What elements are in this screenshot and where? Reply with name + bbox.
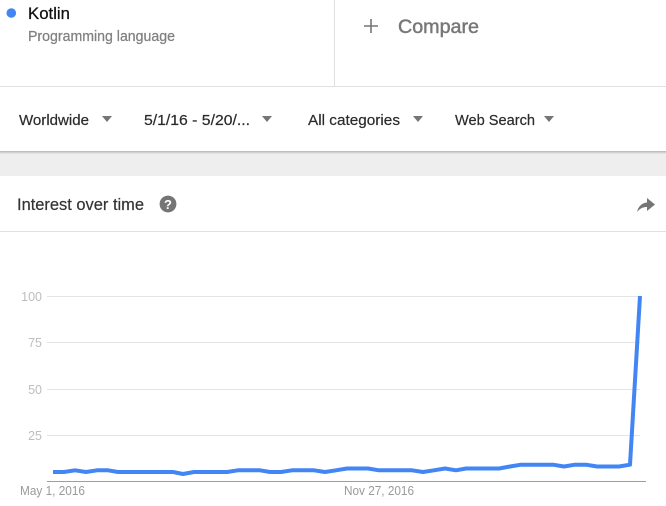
chart gridlines [47,296,640,436]
filter: Worldwide: Worldwide [19,112,89,129]
grey separator band [0,151,666,176]
data line: Kotlin [53,296,640,474]
panel: interest over time header [0,176,666,232]
y axis labels: 25 [28,429,42,443]
x axis labels: May 1, 2016 [20,484,85,498]
y axis labels [21,290,42,443]
line chart: interest over time [20,290,646,498]
x axis labels: Nov 27, 2016 [344,484,414,498]
filter: Web Search: Web Search [455,112,535,129]
panel: filter bar [0,87,666,152]
icon: help [160,196,176,212]
term name: Kotlin: Kotlin [28,5,70,23]
y axis labels: 75 [28,336,42,350]
compare label: Compare [398,16,479,38]
filter: All categories: All categories [308,112,400,129]
icon: plus [364,19,378,33]
icon: Kotlin blue series dot [6,8,16,18]
panel: search term header [0,0,666,87]
x axis labels [20,484,414,498]
icon: share arrow [637,198,655,212]
filter: date range: 5/1/16 - 5/20/... [144,112,250,129]
icon: help: ? [164,197,172,212]
heading: Interest over time: Interest over time [17,196,144,214]
x axis line [47,481,646,482]
y axis labels: 100 [21,290,42,304]
y axis labels: 50 [28,383,42,397]
term type: Programming language: Programming language [28,29,175,45]
